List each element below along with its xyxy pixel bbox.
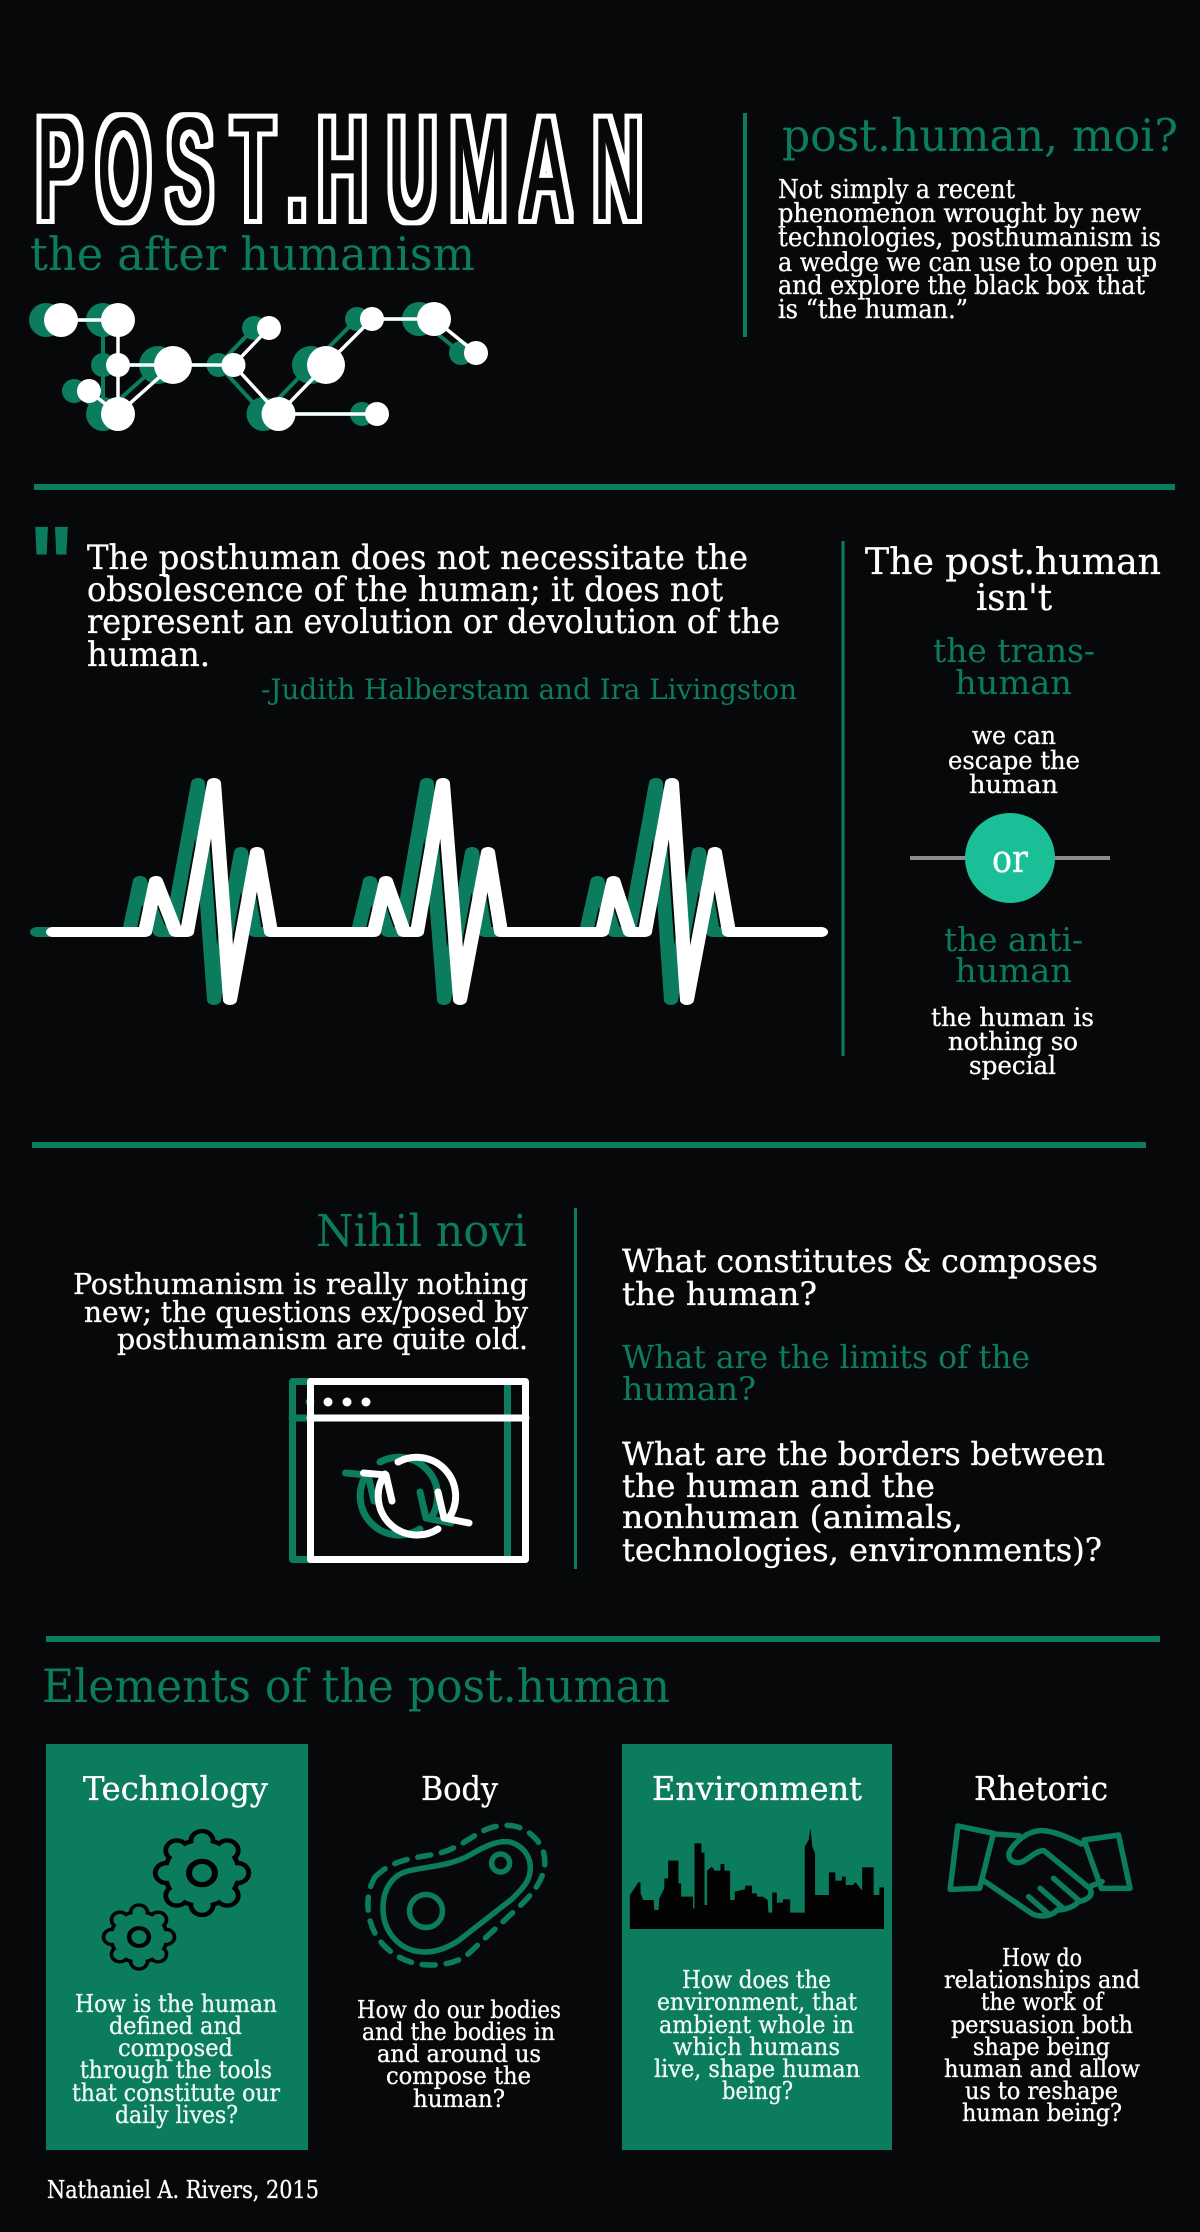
body text: phenomenon wrought by new [778,199,1141,229]
attribution: -Judith Halberstam and Ira Livingston [261,673,797,706]
card text: us to reshape [965,2077,1118,2105]
card text [72,1990,281,2129]
divider: or: or [992,837,1029,881]
anti-human description: special [969,1051,1056,1080]
card text: How does the [682,1966,831,1994]
card text: through the tools [80,2056,272,2084]
card text: which humans [673,2033,840,2061]
body text: technologies, posthumanism is [778,223,1161,253]
trans-human description: we can [972,721,1056,750]
body text [778,175,1161,325]
heading: isn't [976,578,1052,619]
icon: cell body [368,1825,545,1965]
question 1 [622,1242,1098,1313]
card text: shape being [973,2033,1110,2061]
quote text: The posthuman does not necessitate the [87,538,748,578]
heading: Nihil novi [316,1206,527,1257]
heading: The post.human [865,542,1161,583]
panel: post.human, moi? [743,109,1178,337]
trans-human description: escape the [948,746,1080,775]
body text: a wedge we can use to open up [778,248,1157,278]
body text: is “the human.” [778,295,968,325]
icon: handshake [950,1826,1130,1916]
quote text [87,538,780,675]
card text: persuasion both [951,2011,1133,2039]
card text: How do our bodies [357,1996,561,2024]
heading [865,542,1161,619]
card title: Technology [83,1769,268,1808]
icon: browser window with refresh [292,1382,526,1560]
the anti-human: human [955,951,1072,990]
card title: Rhetoric [974,1769,1108,1808]
body text: new; the questions ex/posed by [84,1295,528,1329]
card text: the work of [981,1988,1105,2016]
quote text: obsolescence of the human; it does not [87,570,724,610]
card text: daily lives? [115,2101,238,2129]
quote text: represent an evolution or devolution of the [87,602,780,642]
card text: defined and [109,2012,242,2040]
icon: molecule network [29,302,488,431]
question 3 [622,1435,1105,1569]
question 2: human? [622,1370,756,1408]
question 3: the human and the [622,1467,935,1505]
the anti-human [944,920,1083,990]
body text: posthumanism are quite old. [117,1322,528,1356]
card text [357,1996,561,2113]
question 3: What are the borders between [622,1435,1105,1473]
heading: Elements of the post.human: Elements of the post.human [42,1659,670,1713]
card text: How is the human [75,1990,277,2018]
card: Body [357,1769,561,2113]
icon: quote mark: " [29,504,74,627]
chart: heartbeat line [37,783,821,1000]
divider: or [910,813,1110,903]
question 1: the human? [622,1275,817,1313]
icon: city skyline [630,1828,884,1929]
card text [654,1966,860,2105]
card text: compose the [386,2062,531,2090]
panel: quotation [29,504,797,706]
trans-human description [948,721,1080,799]
icon: gears [105,1833,246,1967]
card text: ambient whole in [659,2011,854,2039]
card text [944,1944,1141,2127]
panel: the post.human isn't [842,541,1161,1080]
card text: that constitute our [72,2079,281,2107]
body text: and explore the black box that [778,271,1146,301]
subtitle: the after humanism [30,227,475,281]
card text: human? [413,2085,505,2113]
the anti-human: the anti- [944,920,1083,959]
card title: Environment [652,1769,862,1808]
the trans-human [933,631,1095,702]
anti-human description [931,1003,1094,1080]
question 1: What constitutes & composes [622,1242,1098,1280]
card text: composed [118,2034,233,2062]
card title: Body [421,1769,498,1808]
card text: live, shape human [654,2055,860,2083]
quote text: human. [87,635,210,675]
body text: Not simply a recent [778,175,1016,205]
panel: Nihil novi [73,1206,528,1560]
title: POST.HUMAN: POST.HUMAN [37,88,641,249]
panel: questions [622,1242,1105,1569]
trans-human description: human [969,770,1058,799]
anti-human description: nothing so [948,1027,1078,1056]
card text: and around us [377,2040,541,2068]
anti-human description: the human is [931,1003,1094,1032]
credit: Nathaniel A. Rivers, 2015 [47,2176,319,2204]
the trans-human: the trans- [933,631,1095,670]
card text: human and allow [944,2055,1141,2083]
card: Rhetoric [944,1769,1141,2127]
card text: human being? [962,2099,1122,2127]
card text: being? [722,2077,793,2105]
question 3: nonhuman (animals, [622,1498,963,1536]
heading: post.human, moi? [782,109,1178,162]
card text: environment, that [657,1988,857,2016]
question 3: technologies, environments)? [622,1531,1102,1569]
card: Environment [622,1744,892,2150]
card text: relationships and [944,1966,1140,1994]
question 2: What are the limits of the [622,1338,1030,1376]
card text: How do [1002,1944,1082,1972]
question 2 [622,1338,1030,1408]
body text [73,1267,528,1356]
body text: Posthumanism is really nothing [73,1267,528,1301]
card text: and the bodies in [362,2018,555,2046]
card: Technology [46,1744,308,2150]
the trans-human: human [955,663,1072,702]
